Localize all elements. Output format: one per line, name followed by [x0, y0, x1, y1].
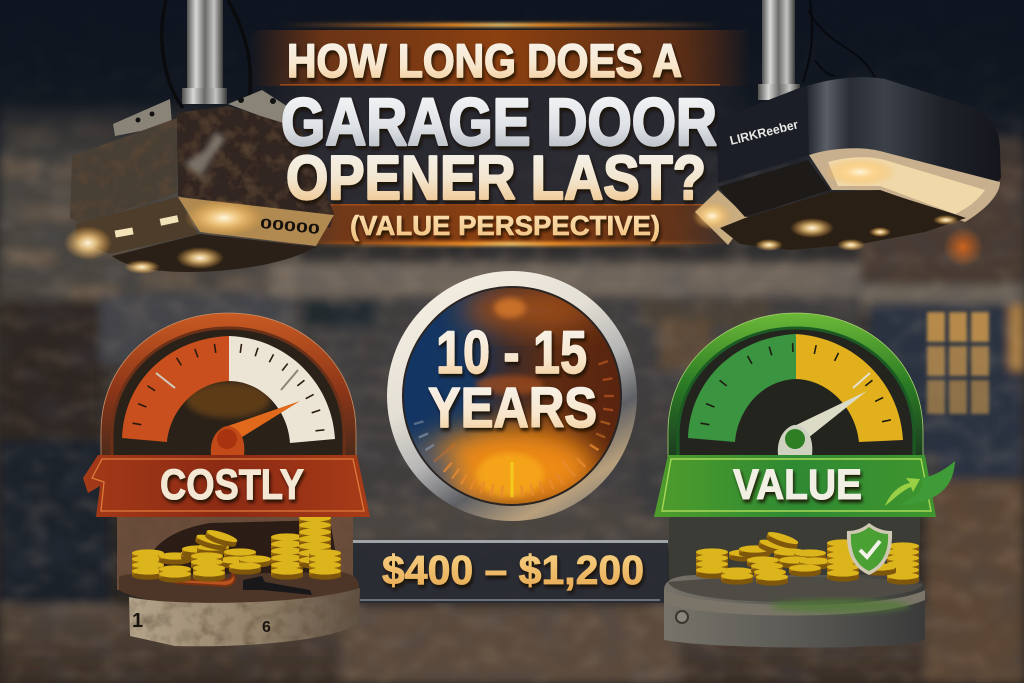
costly white segment	[229, 336, 335, 443]
costly label: COSTLY	[160, 461, 304, 509]
price plaque	[353, 540, 668, 603]
light band and underside	[692, 148, 1000, 251]
years text: 10 - 15	[436, 319, 587, 386]
costly gauge ticks	[132, 344, 324, 431]
gauge base numbers: 1	[132, 610, 143, 632]
value gauge inner	[678, 328, 914, 458]
costly coins	[132, 514, 341, 583]
costly coin shelf: 6	[262, 619, 271, 636]
brand label: LIRKReeber	[728, 117, 800, 148]
costly red segment	[122, 336, 229, 442]
title backing bands	[250, 23, 750, 246]
left opener: old rusty unit	[64, 0, 334, 274]
vent slots: 00000	[259, 215, 321, 237]
value gauge ticks	[700, 343, 891, 425]
value coins	[696, 530, 919, 586]
panel: value gauge	[654, 313, 955, 648]
lower light band	[64, 197, 334, 274]
title	[281, 34, 717, 241]
panel: costly gauge	[83, 313, 370, 646]
costly banner	[83, 455, 370, 517]
costly needle and hub	[211, 401, 300, 455]
value label: VALUE	[733, 461, 862, 509]
costly coin shelf	[117, 510, 360, 646]
right opener: new black unit	[692, 0, 1001, 251]
price text: $400 – $1,200	[382, 547, 644, 593]
years text: YEARS	[428, 376, 597, 440]
hanging rail and cables	[162, 0, 251, 108]
center lifespan dial	[384, 271, 637, 521]
value banner	[654, 455, 955, 517]
value needle and hub	[778, 391, 867, 455]
costly cavity glow	[186, 382, 270, 418]
costly arch housing	[101, 313, 356, 458]
shelf bolt	[676, 611, 688, 623]
rail and cables	[758, 0, 875, 100]
value green segment	[688, 334, 796, 442]
icon: growth arrow and leaf	[885, 461, 955, 506]
scratched paint mark	[185, 132, 226, 186]
title line 1: HOW LONG DOES A	[287, 34, 682, 87]
subtitle: (VALUE PERSPECTIVE)	[350, 210, 660, 241]
title line 2: GARAGE DOOR	[281, 85, 717, 160]
value yellow segment	[796, 334, 903, 442]
dial ticks	[414, 361, 614, 497]
years text	[428, 319, 597, 440]
title line 3: OPENER LAST?	[286, 144, 706, 213]
housing	[70, 106, 334, 228]
icon: shield with check	[847, 523, 892, 575]
housing main	[807, 77, 1001, 190]
value coin shelf	[664, 510, 925, 648]
housing front panel	[717, 85, 809, 183]
value arch housing	[668, 313, 923, 458]
strap	[176, 572, 235, 586]
costly gauge inner	[112, 328, 344, 458]
wrench tool	[243, 576, 312, 595]
mounting brackets	[113, 90, 296, 136]
